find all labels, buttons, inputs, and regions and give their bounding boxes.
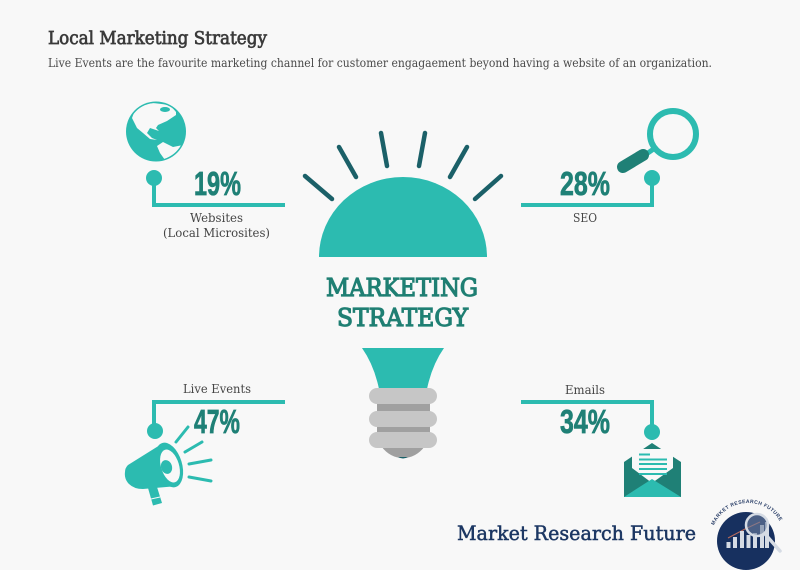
label: websites: Websites bbox=[190, 210, 243, 225]
brand name: Market Research Future bbox=[457, 522, 696, 545]
connector line bbox=[154, 402, 285, 431]
panel: websites bbox=[126, 102, 285, 240]
icon: envelope bbox=[624, 443, 681, 497]
value: 34%: 34% bbox=[560, 403, 610, 440]
connector line bbox=[521, 402, 652, 432]
logo: MARKET RESEARCH FUTURE bbox=[711, 500, 782, 526]
centre heading: MARKETING bbox=[326, 273, 478, 302]
value: 47%: 47% bbox=[194, 403, 240, 440]
panel: seo bbox=[521, 111, 696, 225]
bulb dome bbox=[319, 177, 487, 257]
connector dot bbox=[644, 170, 660, 186]
connector line bbox=[154, 178, 285, 205]
bulb base bbox=[369, 388, 437, 458]
logo bbox=[711, 500, 782, 570]
connector dot bbox=[644, 424, 660, 440]
label: websites: (Local Microsites) bbox=[163, 225, 270, 240]
icon: globe bbox=[126, 102, 186, 162]
icon: magnifier bbox=[623, 111, 696, 167]
connector dot bbox=[147, 423, 163, 439]
value: 28%: 28% bbox=[560, 165, 610, 202]
bulb neck bbox=[362, 348, 444, 389]
rays bbox=[305, 133, 501, 199]
panel: central light bulb bbox=[305, 133, 501, 458]
value: 19%: 19% bbox=[194, 165, 241, 202]
centre heading: STRATEGY bbox=[337, 303, 469, 332]
icon: megaphone bbox=[125, 427, 211, 506]
connector line bbox=[521, 178, 652, 205]
label: seo: SEO bbox=[573, 210, 597, 225]
panel: live events bbox=[125, 381, 285, 506]
label: live events: Live Events bbox=[183, 381, 251, 396]
label: emails: Emails bbox=[565, 382, 605, 397]
subtitle: Live Events are the favourite marketing channel for customer engagaement beyond having a website of an organization. bbox=[48, 55, 712, 70]
panel: emails bbox=[521, 382, 681, 497]
title: Local Marketing Strategy bbox=[48, 29, 267, 49]
connector dot bbox=[146, 170, 162, 186]
